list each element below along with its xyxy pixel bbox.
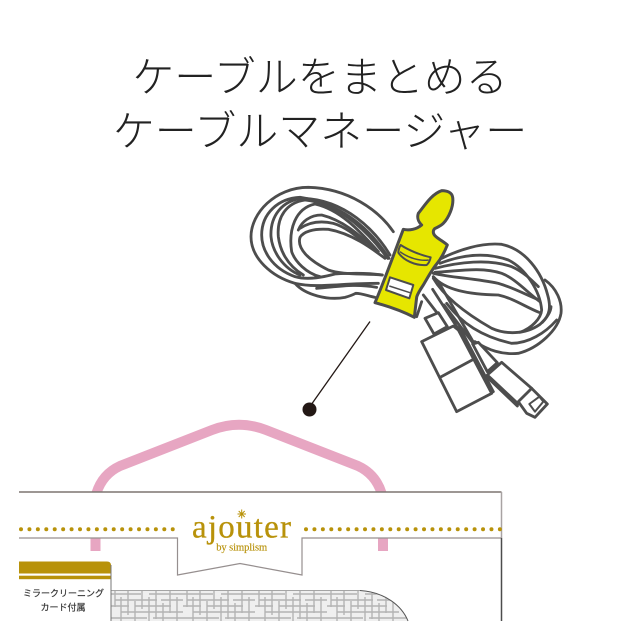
logo: ajouter by simplism: ajouter (192, 510, 291, 546)
icon: lightning connector (473, 342, 547, 417)
logo: ajouter by simplism: by simplism (216, 542, 267, 554)
title (113, 54, 527, 155)
badge: mirror cleaning card: ミラークリーニング (23, 588, 104, 598)
right cable loop (433, 244, 561, 354)
dotted rule right (306, 527, 501, 531)
callout leader line with dot (302, 322, 370, 416)
title: ケーブルマネージャー (113, 108, 527, 155)
title: ケーブルをまとめる (132, 54, 508, 101)
icon: USB connector (422, 313, 493, 412)
icon: yellow cable clip (375, 191, 453, 317)
badge: mirror cleaning card: カード付属 (40, 602, 86, 612)
left cable loop (251, 187, 393, 298)
card window outline (111, 590, 360, 592)
dotted rule left (21, 527, 174, 531)
icon: coiled cable with clip (251, 187, 561, 417)
cable ends leaving clip (417, 283, 475, 345)
patterned card window (111, 591, 408, 621)
badge: mirror cleaning card (19, 562, 111, 621)
card window curved edge (360, 590, 408, 621)
package header card (19, 492, 502, 621)
package hanger, pink (96, 425, 383, 551)
